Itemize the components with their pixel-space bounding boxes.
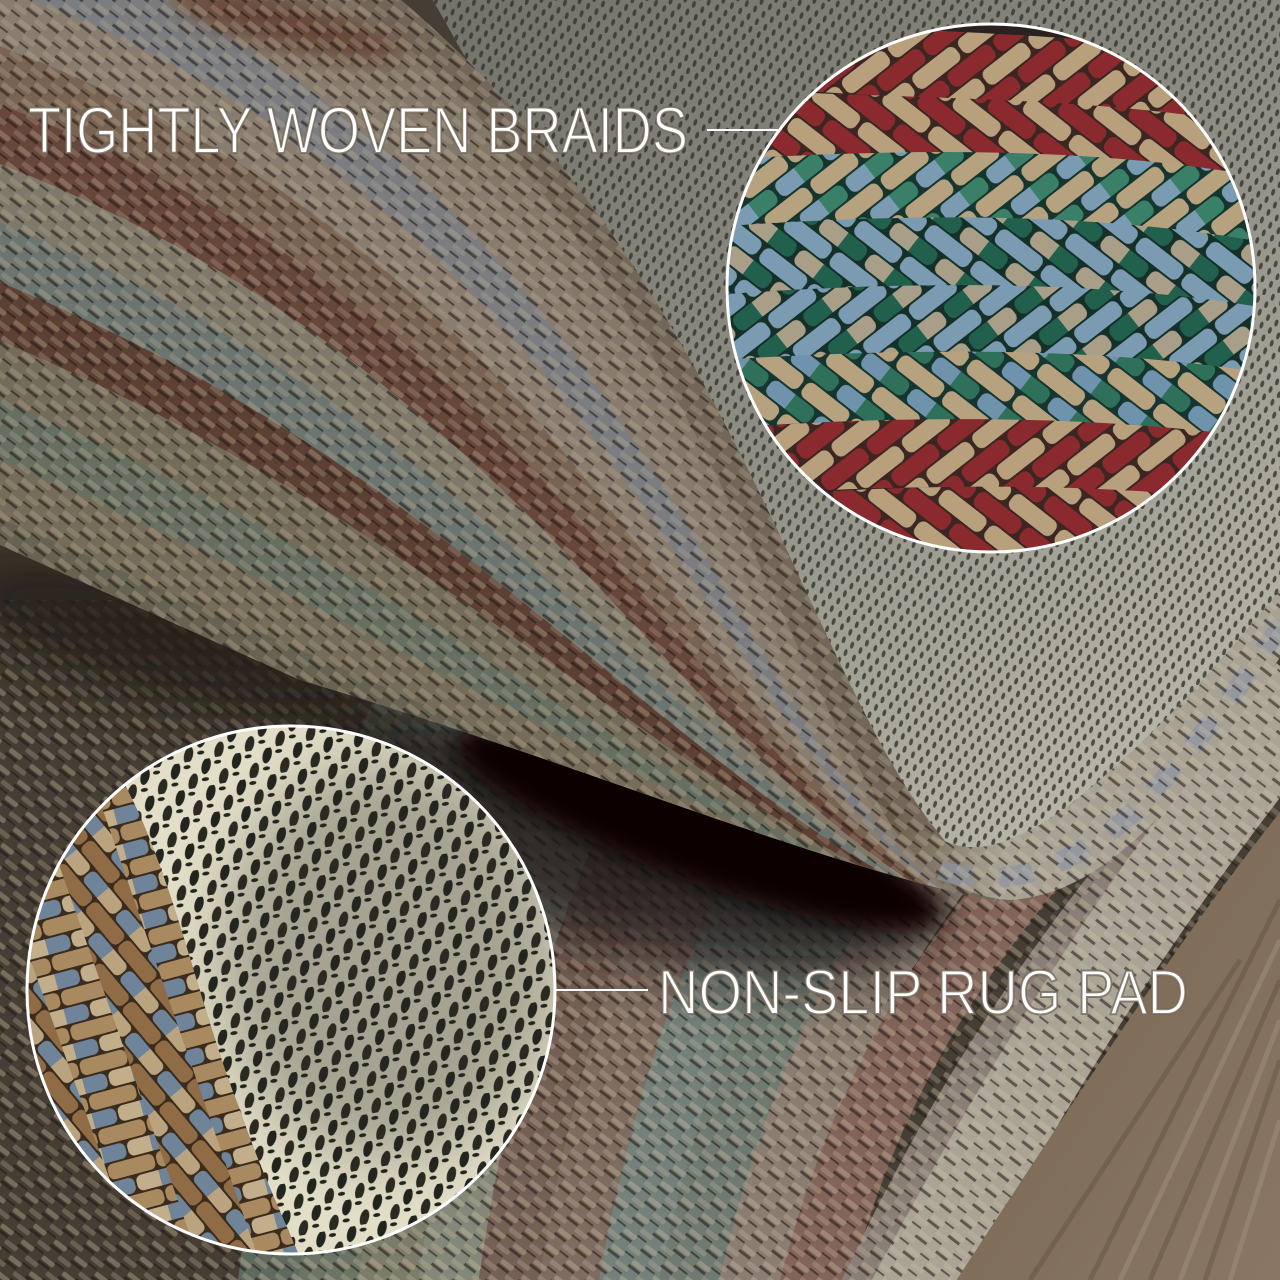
leader line: pad — [555, 989, 648, 991]
label: tightly woven braids: TIGHTLY WOVEN BRAIDS — [28, 93, 688, 167]
callout circle: tightly woven braids — [700, 20, 1280, 560]
accent: rust band at top edge — [168, 0, 412, 77]
callout circle: non-slip rug pad — [26, 724, 556, 1256]
panel: rug pad backing with mesh — [430, 0, 1280, 847]
leader line: braids — [707, 129, 778, 131]
panel: shadow beneath curled rug — [0, 523, 962, 1032]
panel: top rug with colour bands — [0, 0, 1010, 905]
label: non-slip rug pad: NON-SLIP RUG PAD — [658, 958, 1188, 1028]
panel: bright outer braid of lower rug — [910, 690, 1280, 1280]
panel: curled rug rim — [868, 585, 1280, 900]
panel: wood floor — [950, 800, 1280, 1280]
texture: lower rug stitches — [0, 600, 1280, 1280]
panel: lower rug braids — [270, 360, 1280, 1280]
